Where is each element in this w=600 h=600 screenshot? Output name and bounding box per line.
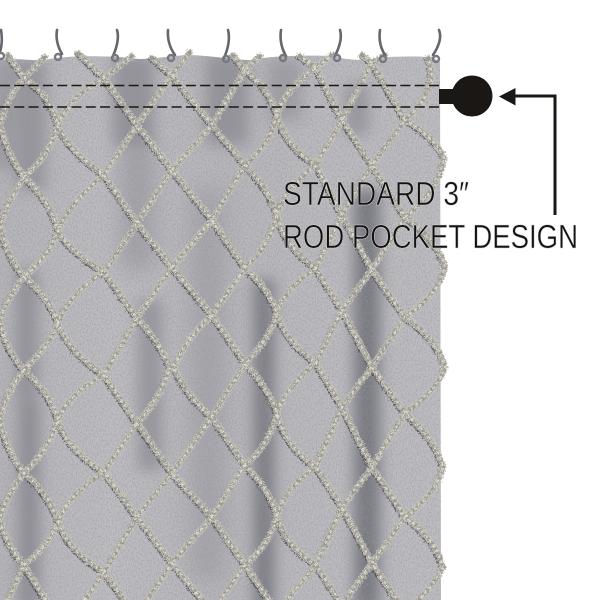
- icon: curtain rod end: [439, 76, 492, 116]
- arrow pointing to rod: [499, 88, 555, 215]
- curtain hooks: [0, 30, 440, 62]
- panel: curtain fabric: [0, 40, 445, 600]
- fold shadows: [0, 55, 380, 600]
- lattice pattern: tufted trellis: [0, 52, 445, 600]
- fabric grain: [0, 40, 445, 600]
- label: standard 3 inch rod pocket design: STANDARD 3″: [283, 175, 469, 212]
- label: standard 3 inch rod pocket design: [283, 175, 578, 255]
- rod pocket dashed lines: [0, 86, 439, 107]
